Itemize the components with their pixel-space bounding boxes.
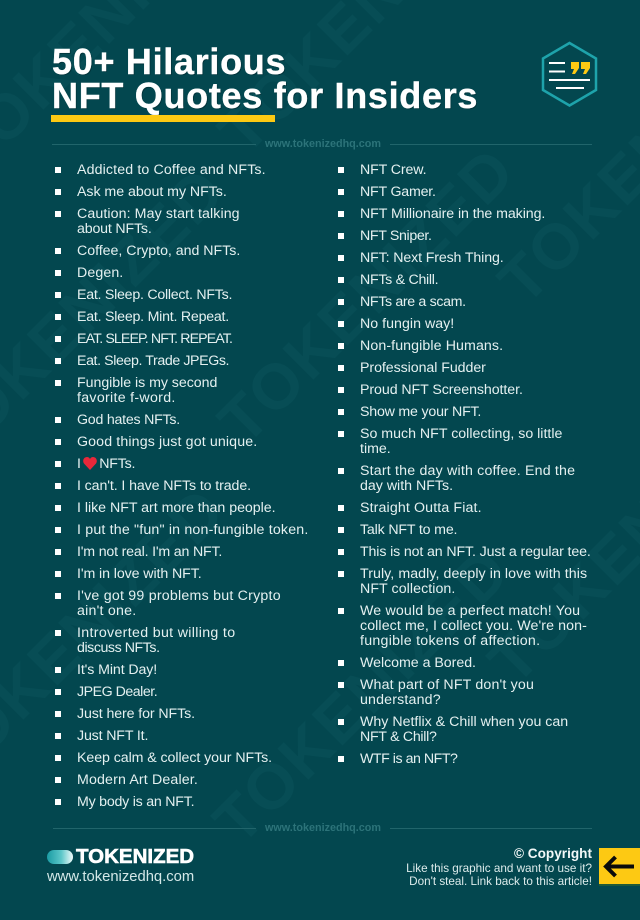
copyright note: © Copyright — [514, 846, 592, 861]
quote: I've got 99 problems but Crypto — [77, 588, 281, 604]
quote: Good things just got unique. — [77, 434, 257, 450]
quote: Start the day with coffee. End the — [360, 463, 575, 479]
quote: We would be a perfect match! You — [360, 603, 580, 619]
quote: No fungin way! — [360, 316, 454, 332]
quote — [338, 405, 593, 420]
quote: NFTs are a scam. — [360, 294, 466, 310]
quote: NFTs & Chill. — [360, 272, 438, 288]
quote — [338, 752, 593, 767]
quote: So much NFT collecting, so little — [360, 426, 562, 442]
quote — [55, 588, 281, 619]
quote: Eat. Sleep. Collect. NFTs. — [77, 287, 232, 303]
quote — [338, 678, 593, 708]
quote — [55, 206, 240, 237]
copyright note: Don't steal. Link back to this article! — [409, 874, 592, 888]
quote — [338, 501, 593, 516]
copyright note — [392, 846, 592, 888]
quote: My body is an NFT. — [77, 794, 194, 810]
quote: time. — [360, 441, 391, 457]
quote — [55, 375, 217, 406]
quote: discuss NFTs. — [77, 640, 160, 656]
quote: Welcome a Bored. — [360, 655, 476, 671]
quote — [338, 715, 593, 745]
title: NFT Quotes for Insiders — [52, 75, 478, 116]
quote — [55, 625, 235, 656]
quote — [338, 523, 593, 538]
title underline — [51, 115, 275, 122]
quote: Professional Fudder — [360, 360, 486, 376]
quote: Ask me about my NFTs. — [77, 184, 227, 200]
quote — [338, 604, 593, 649]
quote: Keep calm & collect your NFTs. — [77, 750, 272, 766]
quote: about NFTs. — [77, 221, 152, 237]
quote — [55, 265, 123, 281]
footer url: www.tokenizedhq.com — [47, 869, 194, 885]
quote: Just NFT It. — [77, 728, 148, 744]
background watermark: TOKENIZED — [205, 133, 529, 457]
quote: understand? — [360, 692, 441, 708]
bottom divider with url: www.tokenizedhq.com — [265, 822, 381, 834]
quote — [338, 656, 593, 671]
quote: Show me your NFT. — [360, 404, 481, 420]
quote: I can't. I have NFTs to trade. — [77, 478, 251, 494]
quote: Proud NFT Screenshotter. — [360, 382, 523, 398]
quote: NFT Crew. — [360, 162, 426, 178]
quote: Eat. Sleep. Trade JPEGs. — [77, 353, 229, 369]
quote: Coffee, Crypto, and NFTs. — [77, 243, 240, 259]
quote — [338, 464, 593, 494]
quote with heart: I NFTs. — [77, 456, 135, 472]
quote: Introverted but willing to — [77, 625, 235, 641]
logo: tokenized — [47, 848, 197, 866]
quote: NFT Sniper. — [360, 228, 432, 244]
logo wordmark: TOKENIZED — [76, 845, 194, 868]
background watermark: TOKENIZED — [200, 533, 524, 857]
quote: It's Mint Day! — [77, 662, 157, 678]
title — [52, 41, 478, 116]
quote: I like NFT art more than people. — [77, 500, 276, 516]
top divider with url: www.tokenizedhq.com — [265, 138, 381, 150]
quote: NFT: Next Fresh Thing. — [360, 250, 504, 266]
quote: Addicted to Coffee and NFTs. — [77, 162, 266, 178]
quote: WTF is an NFT? — [360, 751, 457, 767]
quote: Caution: May start talking — [77, 206, 240, 222]
icon: yellow arrow box — [599, 848, 640, 886]
quote: I'm not real. I'm an NFT. — [77, 544, 222, 560]
quote: Fungible is my second — [77, 375, 217, 391]
quote: favorite f-word. — [77, 390, 176, 406]
quote: NFT Millionaire in the making. — [360, 206, 545, 222]
quote: day with NFTs. — [360, 478, 453, 494]
quote — [338, 427, 593, 457]
quote: Truly, madly, deeply in love with this — [360, 566, 587, 582]
title: 50+ Hilarious — [52, 41, 286, 82]
quote: This is not an NFT. Just a regular tee. — [360, 544, 591, 560]
quote: collect me, I collect you. We're non- — [360, 618, 587, 634]
quote: ain't one. — [77, 603, 136, 619]
quote: JPEG Dealer. — [77, 684, 157, 700]
quote: God hates NFTs. — [77, 412, 180, 428]
icon: quote hexagon — [542, 42, 598, 107]
quote: What part of NFT don't you — [360, 677, 534, 693]
quote: Just here for NFTs. — [77, 706, 195, 722]
quote: NFT & Chill? — [360, 729, 437, 745]
quote: EAT. SLEEP. NFT. REPEAT. — [77, 331, 232, 347]
quote: Non-fungible Humans. — [360, 338, 503, 354]
quote: I'm in love with NFT. — [77, 566, 202, 582]
quote: Eat. Sleep. Mint. Repeat. — [77, 309, 229, 325]
quote: I put the "fun" in non-fungible token. — [77, 522, 308, 538]
quote: Degen. — [77, 265, 123, 281]
icon: logo pill — [47, 850, 73, 864]
quote: Modern Art Dealer. — [77, 772, 198, 788]
quote: NFT Gamer. — [360, 184, 436, 200]
quote: NFT collection. — [360, 581, 455, 597]
quote: Straight Outta Fiat. — [360, 500, 482, 516]
quote: fungible tokens of affection. — [360, 633, 540, 649]
quote — [338, 567, 593, 597]
quote: Talk NFT to me. — [360, 522, 457, 538]
quote: Why Netflix & Chill when you can — [360, 714, 568, 730]
quote — [338, 383, 593, 398]
copyright note: Like this graphic and want to use it? — [406, 862, 592, 875]
